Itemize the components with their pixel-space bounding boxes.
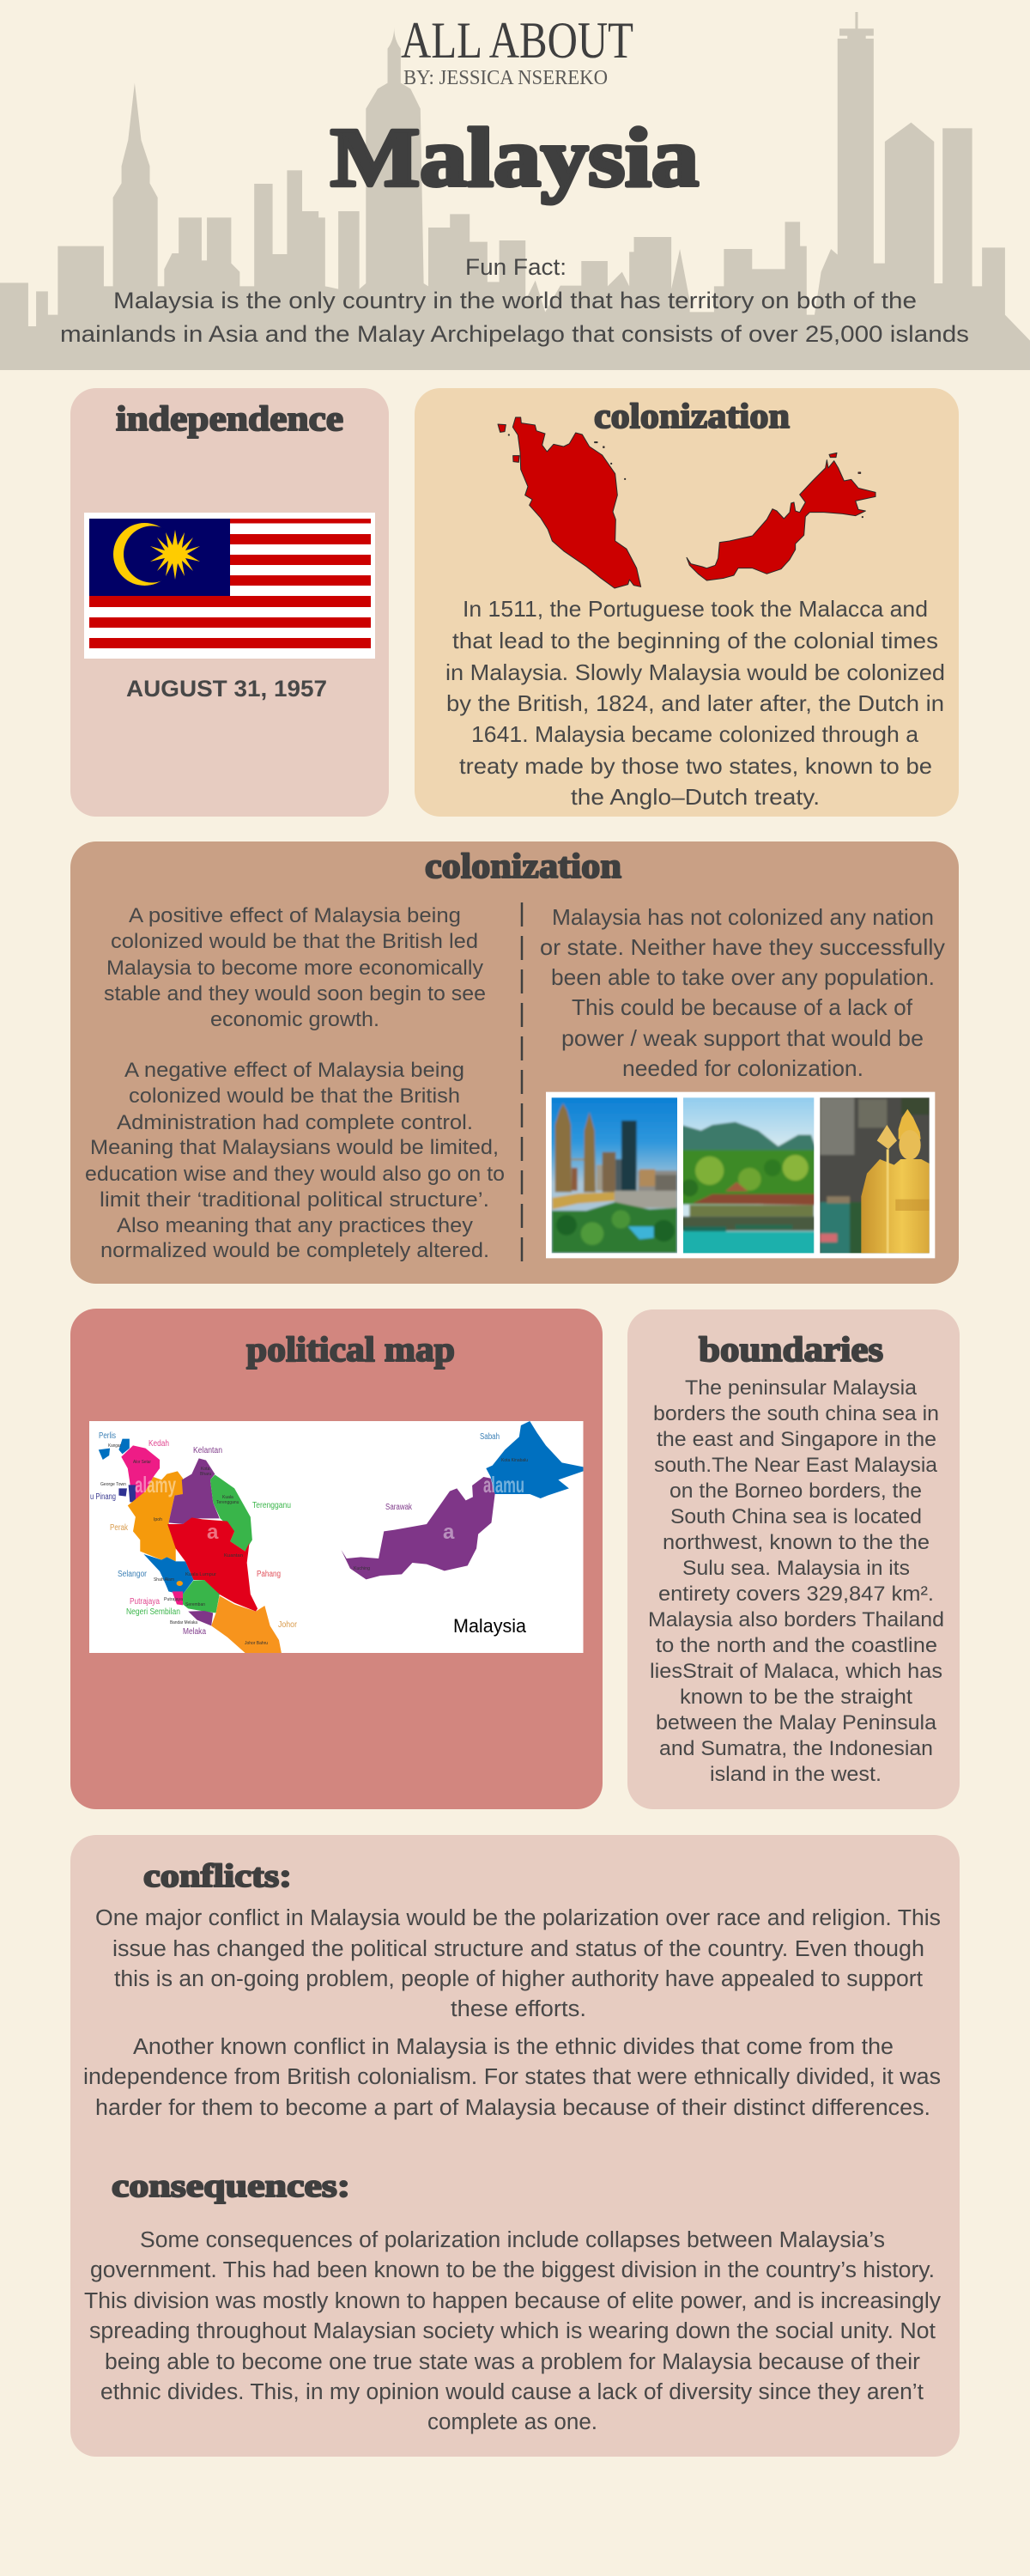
map: states of malaysia: Alor Setar — [133, 1460, 151, 1465]
boundaries heading: boundaries — [699, 1329, 883, 1369]
boundaries text: Sulu sea. Malaysia in its — [682, 1557, 910, 1580]
header: byline: BY: JESSICA NSEREKO — [403, 67, 608, 89]
boundaries text: island in the west. — [710, 1763, 882, 1786]
has not colonized text: power / weak support that would be — [561, 1025, 924, 1051]
title: Malaysia — [330, 112, 699, 204]
consequences text: being able to become one true state was a problem for Malaysia because of their — [105, 2350, 921, 2374]
fun fact text — [60, 254, 969, 347]
map: states of malaysia: Kuala — [222, 1495, 233, 1500]
photo: batu caves golden statue — [820, 1097, 930, 1254]
colonization history text: by the British, 1824, and later after, the Dutch in — [446, 690, 944, 716]
has not colonized text: needed for colonization. — [622, 1055, 863, 1081]
independence date: AUGUST 31, 1957 — [126, 676, 327, 702]
colonization history text: that lead to the beginning of the colonial times — [452, 628, 938, 653]
map: states of malaysia: Johor — [278, 1620, 298, 1630]
header: all about: ALL ABOUT — [401, 12, 633, 69]
boundaries text: entirety covers 329,847 km². — [658, 1583, 934, 1606]
boundaries text: northwest, known to the the — [663, 1531, 930, 1554]
independence heading: independence — [116, 398, 343, 438]
has not colonized text: been able to take over any population. — [551, 964, 935, 990]
conflicts text — [83, 1906, 941, 2120]
map: states of malaysia: Kuala Lumpur — [185, 1572, 216, 1577]
conflicts heading: conflicts: — [143, 1858, 292, 1894]
panel: independence — [70, 388, 389, 817]
colonization history text: in Malaysia. Slowly Malaysia would be colonized — [445, 659, 945, 685]
consequences text: government. This had been known to be the biggest division in the country’s history. — [90, 2258, 935, 2282]
effects of being colonized text: Administration had complete control. — [117, 1111, 473, 1134]
map: states of malaysia: Bharu — [200, 1472, 212, 1477]
panel: colonization history — [415, 388, 959, 817]
conflicts text: these efforts. — [451, 1997, 586, 2021]
conflicts text: harder for them to become a part of Malaysia because of their distinct differences. — [95, 2096, 930, 2120]
map: states of malaysia: Kangar — [108, 1443, 121, 1449]
photo collage — [546, 1092, 935, 1258]
map: states of malaysia: alamy — [135, 1472, 176, 1498]
fun fact text: mainlands in Asia and the Malay Archipelago that consists of over 25,000 islands — [60, 321, 969, 347]
colonization effects heading: colonization — [425, 846, 621, 885]
consequences text: spreading throughout Malaysian society which is wearing down the social unity. Not — [89, 2319, 936, 2343]
panel: colonization effects — [70, 841, 959, 1284]
map: states of malaysia: George Town — [100, 1482, 126, 1487]
consequences text: ethnic divides. This, in my opinion would cause a lack of diversity since they aren’t — [100, 2380, 924, 2404]
boundaries text — [648, 1376, 944, 1786]
map: states of malaysia: Selangor — [118, 1570, 148, 1579]
map: states of malaysia: Sabah — [480, 1432, 500, 1442]
effects of being colonized text: colonized would be that the British led — [111, 930, 478, 953]
map: states of malaysia: Perlis — [99, 1431, 116, 1441]
map: states of malaysia: Johor Bahru — [245, 1641, 268, 1646]
boundaries text: the east and Singapore in the — [657, 1428, 936, 1451]
map: states of malaysia: a — [207, 1521, 219, 1544]
map: states of malaysia: a — [443, 1521, 455, 1544]
map: states of malaysia: Ipoh — [154, 1517, 162, 1522]
consequences heading: consequences: — [112, 2168, 350, 2204]
effects of being colonized text: normalized would be completely altered. — [100, 1239, 489, 1262]
colonization heading: colonization — [594, 396, 790, 435]
panel: boundaries — [627, 1309, 960, 1809]
effects of being colonized text: Also meaning that any practices they — [117, 1214, 473, 1237]
effects of being colonized text: stable and they would soon begin to see — [104, 982, 486, 1005]
map: states of malaysia: Bandar Melaka — [170, 1620, 197, 1625]
map: states of malaysia: Putrajaya — [164, 1597, 183, 1602]
map: states of malaysia: Terengganu — [252, 1501, 291, 1510]
map: states of malaysia — [89, 1421, 584, 1653]
boundaries text: known to be the straight — [680, 1686, 912, 1709]
map: states of malaysia: Kuantan — [224, 1553, 243, 1558]
effects of being colonized text — [85, 904, 505, 1262]
consequences text: complete as one. — [427, 2410, 597, 2434]
effects of being colonized text: A negative effect of Malaysia being — [124, 1059, 464, 1082]
consequences text: Some consequences of polarization include collapses between Malaysia’s — [140, 2228, 885, 2252]
boundaries text: and Sumatra, the Indonesian — [659, 1737, 933, 1760]
effects of being colonized text: Malaysia to become more economically — [106, 957, 483, 980]
map: malaysia red silhouette — [498, 417, 876, 588]
map: states of malaysia: Seremban — [185, 1602, 205, 1607]
boundaries text: between the Malay Peninsula — [656, 1711, 937, 1735]
city skyline silhouette — [0, 12, 1030, 370]
map: states of malaysia: Malaysia — [453, 1615, 527, 1637]
boundaries text: borders the south china sea in — [653, 1402, 939, 1425]
colonization history text: the Anglo–Dutch treaty. — [571, 784, 820, 810]
boundaries text: South China sea is located — [670, 1505, 922, 1528]
effects of being colonized text: Meaning that Malaysians would be limited, — [90, 1136, 499, 1159]
map: states of malaysia: Shah Alam — [154, 1577, 174, 1583]
panel: conflicts and consequences — [70, 1835, 960, 2457]
map: states of malaysia: Kedah — [148, 1439, 169, 1449]
map: states of malaysia: u Pinang — [90, 1492, 116, 1502]
map: states of malaysia: Putrajaya — [130, 1597, 160, 1607]
has not colonized text: or state. Neither have they successfully — [540, 934, 945, 960]
has not colonized text: This could be because of a lack of — [572, 994, 913, 1020]
map: states of malaysia: Kuching — [354, 1566, 370, 1571]
boundaries text: liesStrait of Malaca, which has — [650, 1660, 942, 1683]
colonization history text: In 1511, the Portuguese took the Malacca and — [463, 596, 928, 622]
photo: kuala lumpur skyline — [551, 1097, 677, 1254]
effects of being colonized text: limit their ‘traditional political structure’. — [100, 1188, 489, 1212]
map: states of malaysia: Negeri Sembilan — [126, 1607, 180, 1617]
fun fact text: Malaysia is the only country in the world that has territory on both of the — [113, 288, 917, 313]
map: states of malaysia: Kota — [201, 1467, 210, 1472]
photo: river pavilion and mountains — [683, 1097, 814, 1254]
map: states of malaysia: Kota Kinabalu — [501, 1458, 528, 1463]
boundaries text: to the north and the coastline — [656, 1634, 937, 1657]
panel: political map — [70, 1309, 603, 1809]
boundaries text: The peninsular Malaysia — [685, 1376, 918, 1400]
effects of being colonized text: colonized would be that the British — [129, 1084, 460, 1108]
boundaries text: south.The Near East Malaysia — [654, 1454, 938, 1477]
map: states of malaysia: alamu — [483, 1472, 524, 1498]
conflicts text: this is an on-going problem, people of higher authority have appealed to support — [114, 1967, 923, 1991]
conflicts text: One major conflict in Malaysia would be the polarization over race and religion. This — [95, 1906, 941, 1930]
boundaries text: Malaysia also borders Thailand — [648, 1608, 944, 1631]
consequences text: This division was mostly known to happen because of elite power, and is increasingly — [84, 2289, 941, 2313]
conflicts text: independence from British colonialism. For states that were ethnically divided, it was — [83, 2065, 941, 2089]
icon: malaysian flag — [84, 513, 375, 659]
effects of being colonized text: A positive effect of Malaysia being — [129, 904, 461, 927]
colonization history text — [445, 596, 945, 810]
consequences text — [84, 2228, 941, 2434]
map: states of malaysia: Pahang — [257, 1570, 281, 1579]
conflicts text: issue has changed the political structure and status of the country. Even though — [112, 1937, 924, 1961]
map: states of malaysia: Sarawak — [385, 1503, 413, 1512]
political map heading: political map — [246, 1329, 455, 1369]
boundaries text: on the Borneo borders, the — [670, 1479, 922, 1503]
map: states of malaysia: Terengganu — [216, 1500, 239, 1505]
fun fact text: Fun Fact: — [465, 254, 566, 280]
map: states of malaysia: Perak — [110, 1523, 129, 1533]
map: states of malaysia: Kelantan — [193, 1446, 222, 1455]
effects of being colonized text: economic growth. — [210, 1008, 379, 1031]
map: states of malaysia: Melaka — [183, 1627, 206, 1637]
effects of being colonized text: education wise and they would also go on to — [85, 1163, 505, 1186]
has not colonized text: Malaysia has not colonized any nation — [552, 904, 934, 930]
conflicts text: Another known conflict in Malaysia is the ethnic divides that come from the — [133, 2035, 894, 2059]
colonization history text: treaty made by those two states, known to be — [459, 753, 932, 779]
has not colonized text — [540, 904, 945, 1081]
colonization history text: 1641. Malaysia became colonized through a — [471, 721, 919, 747]
